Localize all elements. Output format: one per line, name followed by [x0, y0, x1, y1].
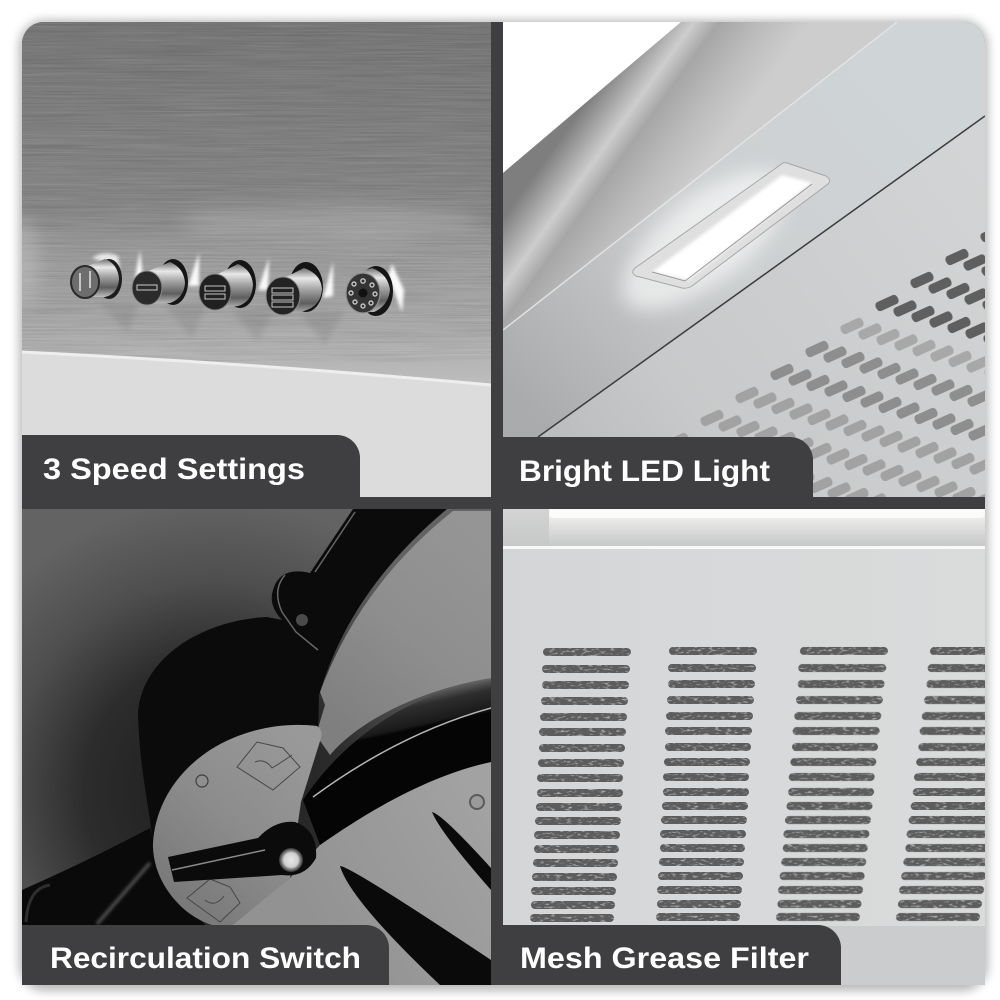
panel: bright LED light	[503, 22, 985, 497]
label: 3 Speed Settings: 3 Speed Settings	[43, 453, 305, 486]
icon: exhaust mode	[187, 879, 240, 922]
brushed steel strip	[503, 22, 985, 460]
black arc band	[303, 680, 491, 845]
lever	[168, 822, 316, 882]
label: Recirculation Switch: Recirculation Switch	[50, 942, 361, 975]
panel: recirculation switch	[22, 509, 491, 985]
knob: speed 1	[132, 259, 188, 305]
label: 3 Speed Settings	[22, 435, 360, 497]
white background corner	[503, 22, 681, 173]
label: Mesh Grease Filter	[503, 925, 841, 985]
lower left black shadow	[22, 828, 210, 930]
panel: 3 speed settings	[6, 22, 491, 497]
black housing	[138, 509, 447, 843]
knob: speed 2	[199, 260, 256, 310]
lower white body	[22, 351, 491, 497]
lower fan blade	[233, 762, 491, 985]
label: Recirculation Switch	[22, 925, 389, 985]
screw	[279, 848, 303, 872]
blade slits and rivet	[340, 795, 491, 985]
knob: light	[346, 266, 393, 316]
top rail	[503, 509, 985, 549]
curved front lip	[503, 22, 806, 329]
knob: fan off	[71, 250, 404, 312]
damper dial	[153, 725, 322, 925]
label: Bright LED Light: Bright LED Light	[519, 455, 770, 488]
mesh slots	[534, 651, 1000, 918]
filter slots	[668, 231, 985, 497]
shadow cones under knobs	[104, 302, 341, 340]
knob: speed 3	[266, 262, 323, 315]
icon: recirculate mode	[237, 742, 300, 790]
panel: mesh grease filter	[503, 509, 1000, 985]
LED light window	[616, 162, 830, 316]
upper fan blade	[316, 511, 491, 755]
label: Mesh Grease Filter: Mesh Grease Filter	[520, 942, 809, 975]
label: Bright LED Light	[503, 437, 813, 497]
